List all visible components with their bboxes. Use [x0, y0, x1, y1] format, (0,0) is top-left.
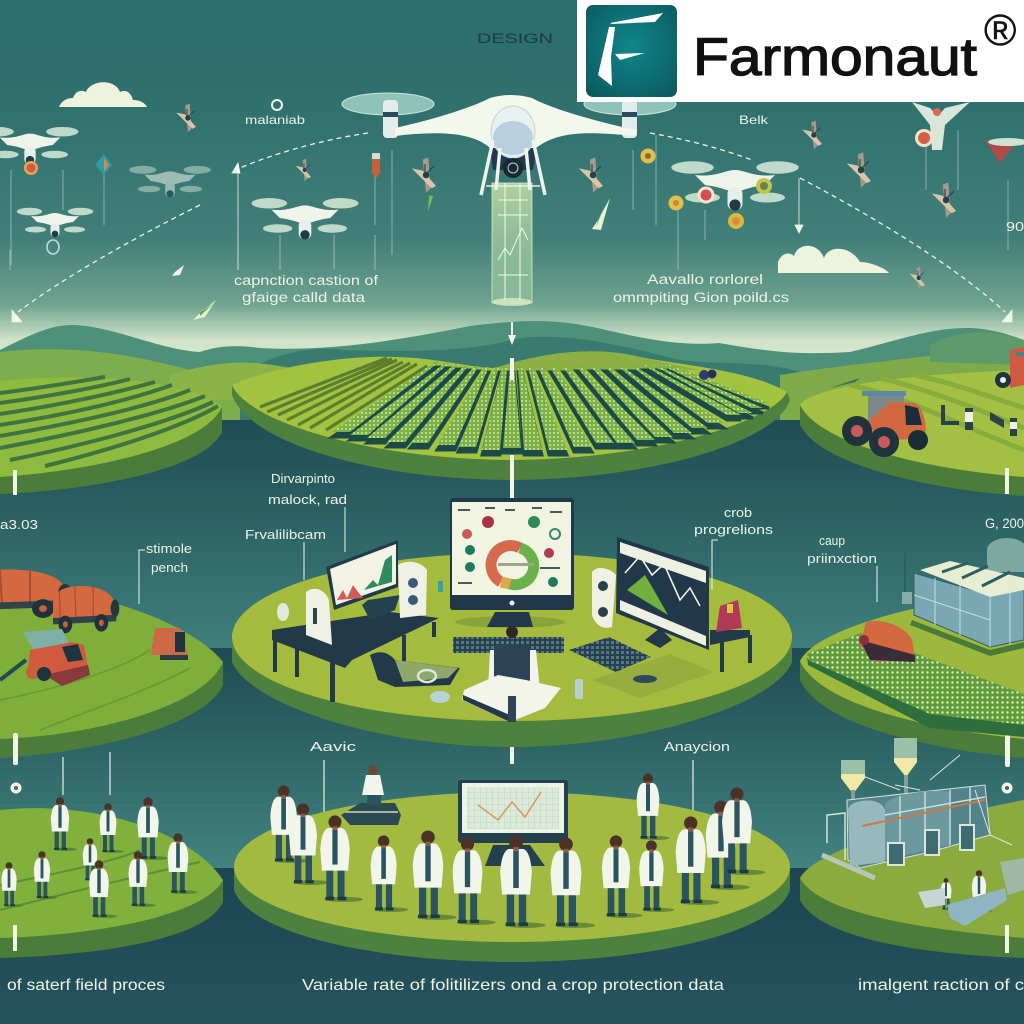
panel: row 2 left — [0, 570, 223, 765]
callout: fertilizers: Frvalilibcam — [245, 528, 326, 542]
callout: distribution: malock, rad — [268, 493, 347, 507]
dashed flow arcs — [18, 133, 1005, 312]
callout: crop protection — [807, 534, 877, 602]
background band row 3 — [0, 868, 1024, 1024]
greenhouse — [910, 538, 1024, 656]
text: processing caption: Aavallo rorlorel — [647, 272, 763, 287]
cloud right — [778, 246, 889, 273]
background sky — [0, 0, 1024, 400]
left pc tower — [277, 562, 443, 645]
text: processing caption: ommpiting Gion poild.cs — [613, 290, 789, 305]
callout: crop progressions: crob — [724, 505, 752, 520]
panel: row 3 right — [800, 738, 1024, 958]
side ticks row 1 mark and circled numbers — [10, 752, 1012, 815]
text: row 1-2 labels: a3.03 — [0, 518, 38, 532]
panel: row 3 left — [0, 797, 223, 958]
left desk — [272, 612, 439, 702]
background band row 2 — [0, 648, 1024, 868]
panel: field row left — [0, 377, 222, 495]
callout: crop protection: caup — [819, 534, 845, 548]
logo panel — [577, 0, 1024, 102]
callout: distribution: Dirvarpinto — [271, 472, 335, 486]
background band row 1 — [0, 394, 1024, 648]
person at desk — [462, 626, 561, 722]
text: capture caption: gfaige calld data — [242, 290, 366, 305]
panel: field row right — [800, 347, 1024, 496]
registered mark: ® — [984, 6, 1016, 55]
text: top labels: malaniab — [245, 113, 305, 127]
seated technician on machine — [341, 765, 401, 825]
small drone top left — [0, 127, 78, 164]
small machine — [699, 370, 716, 380]
field workers — [1, 797, 198, 918]
callout: stimole bench: stimole — [146, 542, 192, 556]
panel: field row centre — [232, 351, 790, 480]
keyboards — [453, 637, 651, 672]
text: processing caption — [613, 272, 789, 305]
drone right cluster — [671, 161, 799, 211]
tanker vehicles — [0, 570, 72, 620]
workers — [941, 405, 1017, 436]
crop sprayer — [859, 621, 915, 662]
callout: fertilizers — [245, 528, 326, 580]
central arrow marks — [508, 322, 516, 764]
callout: crop progressions: progrelions — [694, 522, 774, 537]
plant workers and conveyor — [918, 858, 1024, 926]
text: capture caption — [234, 273, 378, 305]
text: top labels — [245, 100, 1024, 234]
main drone — [342, 93, 676, 306]
analysts — [270, 773, 765, 928]
small drone left lower — [17, 208, 93, 237]
props — [370, 652, 714, 703]
arrow heads and guide lines — [10, 130, 1012, 322]
left monitor — [326, 540, 400, 620]
factory plant — [822, 738, 1012, 878]
callout: crop progressions — [694, 505, 774, 590]
text: design: DESIGN — [477, 31, 553, 46]
harvester — [0, 629, 90, 686]
logo wordmark: Farmonaut — [693, 28, 977, 87]
text: capture caption: capnction castion of — [234, 273, 378, 288]
top right drone — [912, 102, 1024, 163]
text: top labels: 90 — [1006, 219, 1024, 234]
callout: stimole bench — [139, 542, 192, 604]
caption: left: of saterf field proces — [7, 977, 165, 994]
insect drones — [176, 104, 956, 289]
callout: crop protection: priinxction — [807, 552, 877, 566]
analysis screen — [458, 780, 568, 866]
text: row 1-2 labels — [0, 516, 1024, 532]
callout: distribution — [268, 472, 347, 552]
right monitor — [616, 537, 709, 650]
callout: analysis right: Anaycion — [664, 740, 730, 754]
tractor — [842, 391, 928, 457]
donut chart — [491, 546, 534, 585]
callout: analysis left: Aavic — [310, 740, 356, 754]
antenna and sensor — [902, 552, 912, 604]
right pc tower and desk — [592, 568, 752, 672]
caption: right: imalgent raction of c — [858, 977, 1024, 994]
small spreader — [151, 628, 188, 660]
centre monitor — [450, 498, 574, 628]
panel: row 2 centre — [232, 498, 792, 747]
far tractor — [995, 347, 1024, 388]
small drone centre left — [251, 198, 359, 240]
faded drone — [129, 166, 211, 197]
light beam — [492, 183, 532, 306]
panel: row 2 right — [800, 538, 1024, 767]
crop rows — [332, 362, 769, 455]
hills background — [0, 321, 1024, 420]
logo icon — [586, 5, 677, 97]
callout: stimole bench: pench — [151, 561, 188, 575]
pin icons — [24, 129, 933, 320]
caption: centre: Variable rate of folitilizers ond a crop protection data — [302, 977, 724, 994]
crop field — [807, 633, 1024, 737]
panel: row 3 centre — [234, 765, 790, 962]
cloud left — [59, 82, 147, 107]
text: top labels: Belk — [739, 113, 769, 127]
